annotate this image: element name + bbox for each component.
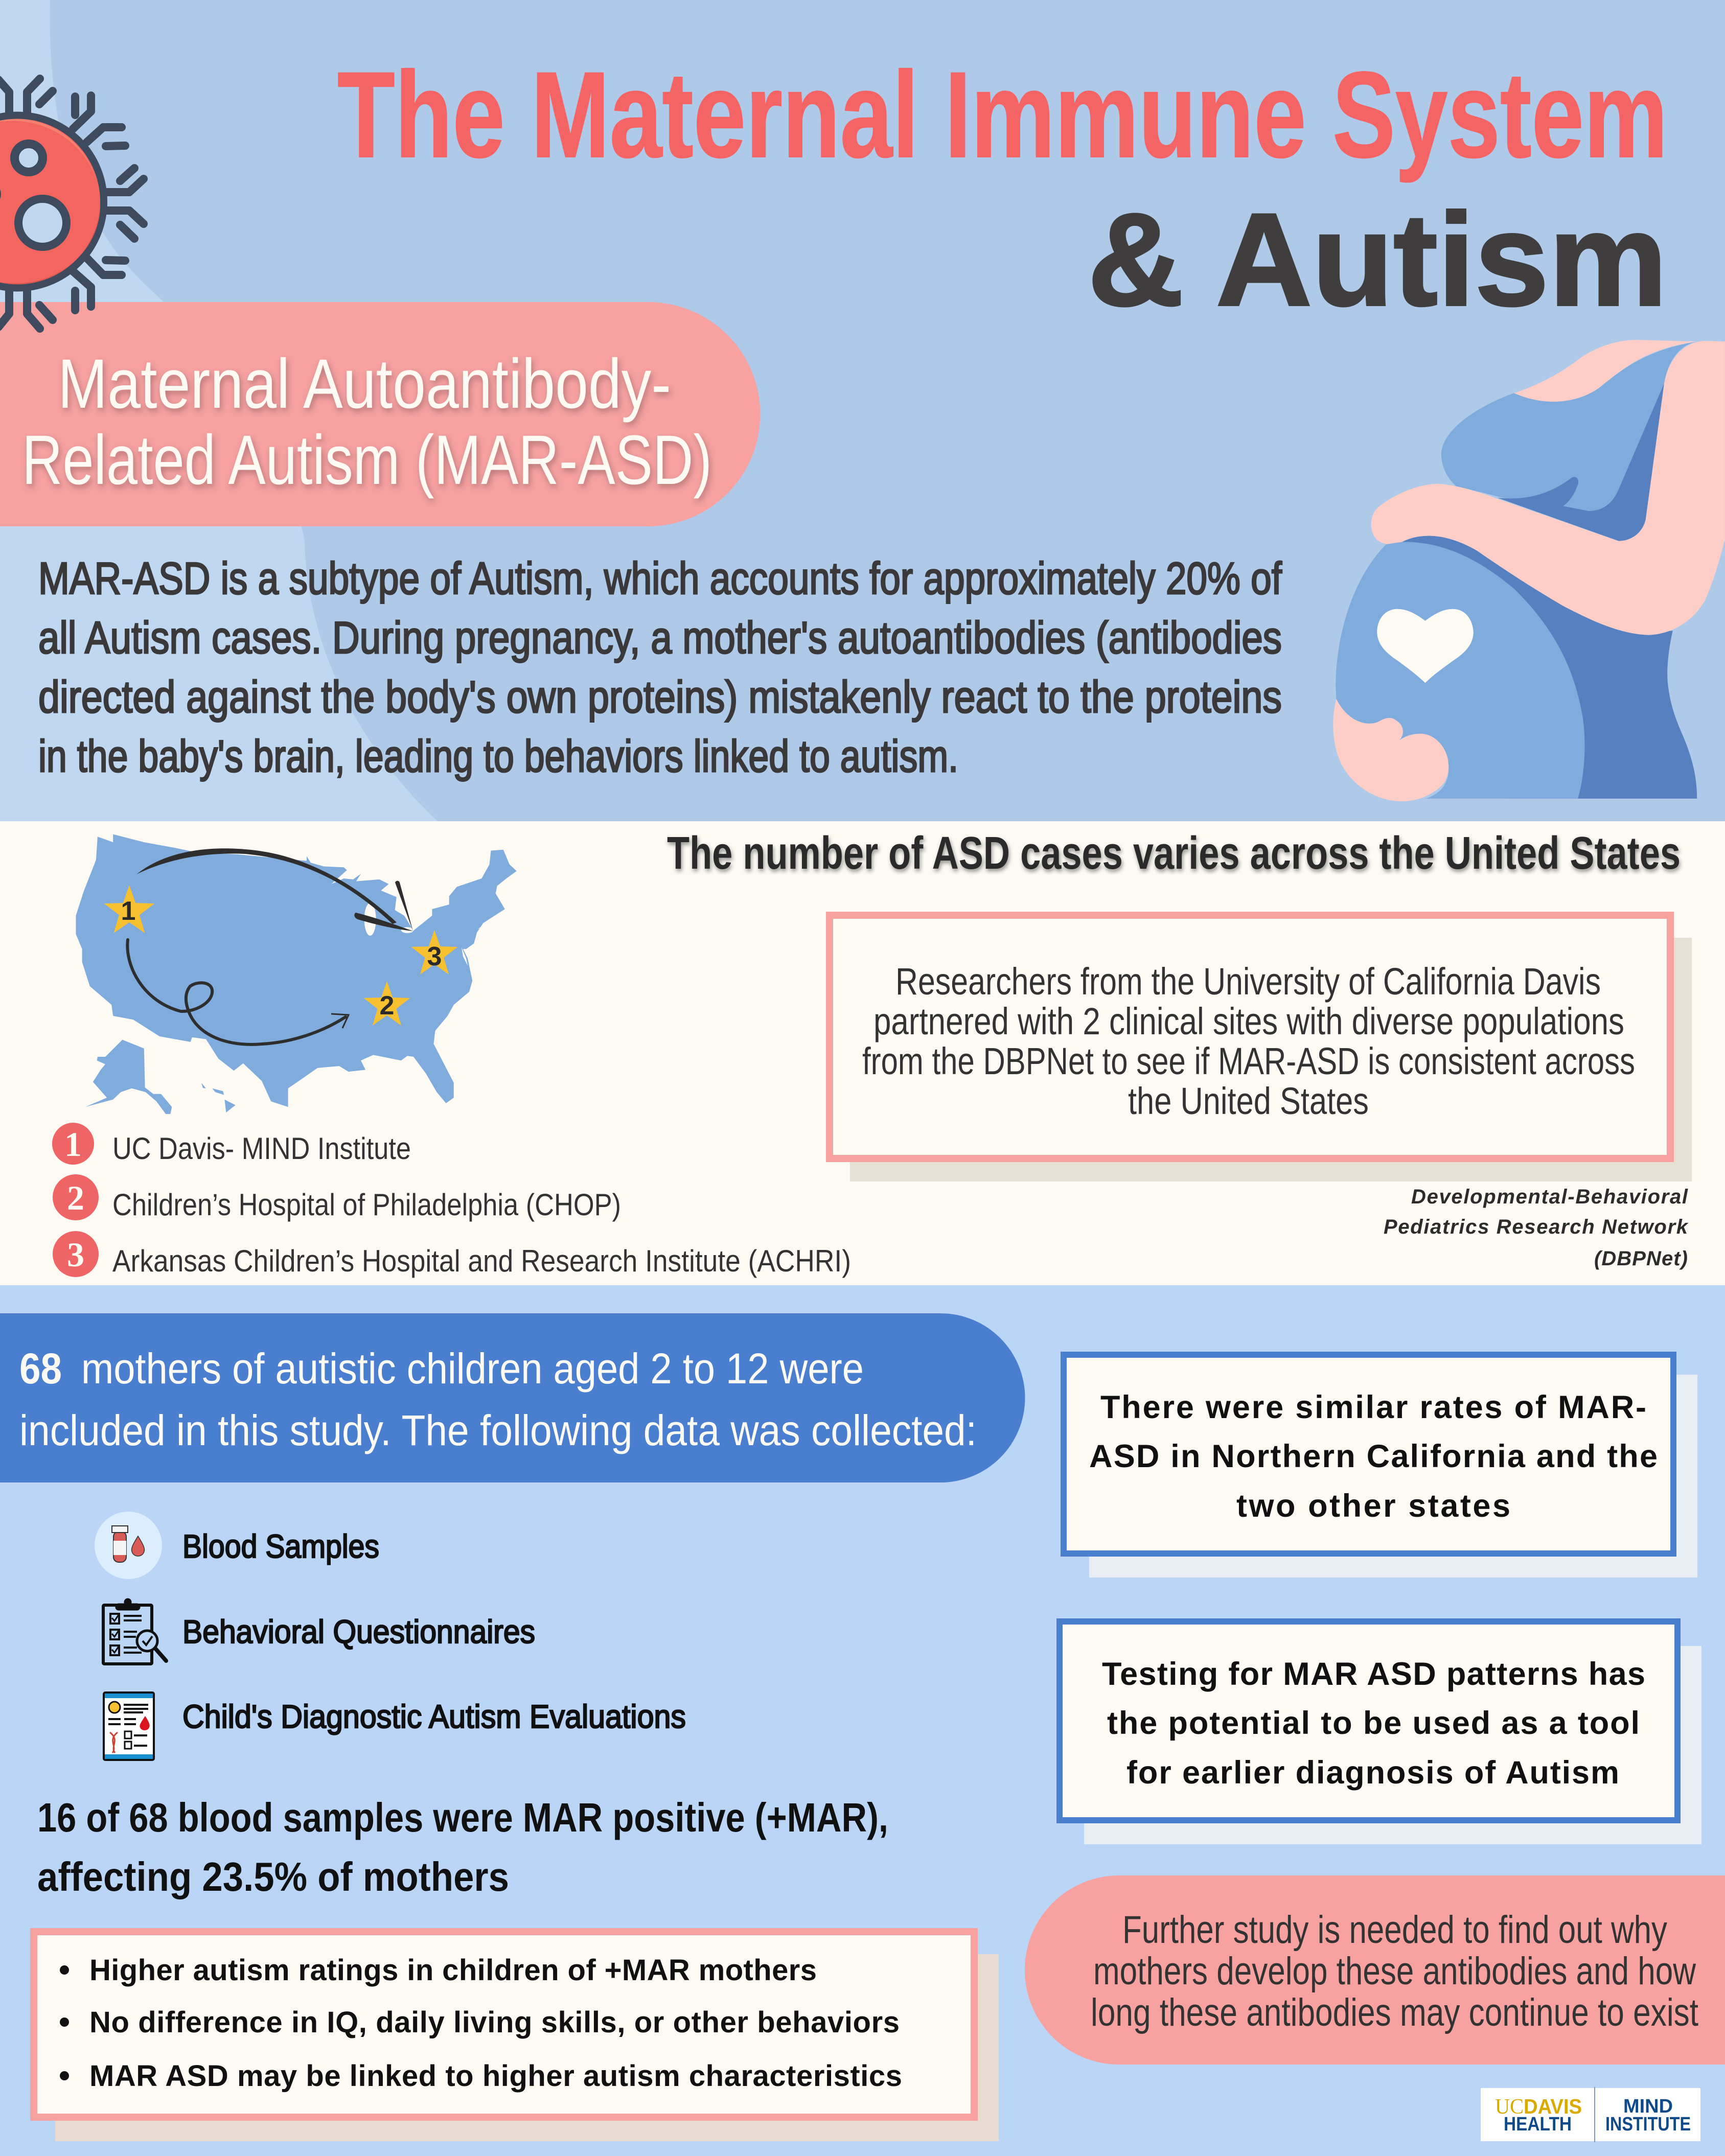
- note: DBPNet: Pediatrics Research Network: [1384, 1216, 1689, 1238]
- map of the United States: [76, 834, 517, 1114]
- star marker 3: 3: [427, 942, 442, 971]
- logo: UC Davis Health MIND Institute: [1481, 2087, 1700, 2142]
- finding: MAR positive: 16 of 68 blood samples were MAR positive (+MAR),: [37, 1795, 888, 1840]
- icon: immune cell: [0, 79, 144, 329]
- intro paragraph: in the baby's brain, leading to behaviors linked to autism.: [38, 731, 958, 781]
- data item: questionnaires: [103, 1599, 535, 1664]
- site 2: 2: [67, 1178, 84, 1217]
- callout: similar rates: ASD in Northern California and the: [1089, 1439, 1658, 1474]
- note: DBPNet: Developmental-Behavioral: [1411, 1186, 1688, 1208]
- site 3: 3: [67, 1235, 84, 1274]
- data item: blood samples: Blood Samples: [182, 1528, 379, 1565]
- site 1: [52, 1123, 411, 1166]
- illustration: pregnant woman: [1333, 340, 1725, 801]
- data item: questionnaires: Behavioral Questionnaires: [182, 1613, 535, 1650]
- logo: UC Davis Health MIND Institute: DAVIS: [1524, 2095, 1582, 2118]
- callout: further study: [1025, 1875, 1725, 2065]
- intro paragraph: directed against the body's own proteins) mistakenly react to the proteins: [38, 671, 1282, 722]
- note: DBPNet: [1384, 1186, 1689, 1270]
- callout: researchers: the United States: [1128, 1080, 1369, 1122]
- callout: MAR outcomes: Higher autism ratings in children of +MAR mothers: [89, 1954, 817, 1987]
- intro paragraph: MAR-ASD is a subtype of Autism, which accounts for approximately 20% of: [38, 553, 1282, 604]
- site 1: 1: [64, 1125, 82, 1164]
- finding: MAR positive: affecting 23.5% of mothers: [37, 1854, 509, 1899]
- star marker 3: [411, 930, 458, 975]
- callout: similar rates: two other states: [1236, 1488, 1510, 1524]
- callout: researchers: [830, 915, 1692, 1181]
- study banner: [0, 1313, 1025, 1482]
- callout: MAR outcomes: [34, 1932, 999, 2141]
- title: [337, 47, 1668, 333]
- subtitle pill: Related Autism (MAR-ASD): [22, 421, 712, 499]
- star marker 1: [104, 885, 154, 933]
- study banner: 68: [19, 1344, 62, 1393]
- arrow: to ACHRI: [136, 848, 413, 931]
- title: & Autism: [1088, 186, 1667, 333]
- subtitle pill: [0, 302, 761, 526]
- site 1: UC Davis- MIND Institute: [112, 1131, 411, 1166]
- site 2: Children’s Hospital of Philadelphia (CHOP): [112, 1188, 621, 1222]
- icon: blood tube: [95, 1512, 162, 1579]
- data item: blood samples: [95, 1512, 379, 1579]
- panel: clinical sites background: [0, 821, 1725, 1285]
- site legend: [52, 1123, 851, 1278]
- site 3: Arkansas Children’s Hospital and Research Institute (ACHRI): [112, 1244, 851, 1278]
- data item: diagnostic evaluations: [104, 1693, 686, 1760]
- icon: clipboard with magnifier: [103, 1599, 166, 1664]
- note: DBPNet: (DBPNet): [1594, 1247, 1688, 1270]
- finding: MAR positive: [37, 1795, 888, 1899]
- callout: MAR outcomes: No difference in IQ, daily living skills, or other behaviors: [89, 2006, 900, 2039]
- study banner: included in this study. The following data was collected:: [19, 1406, 977, 1454]
- intro paragraph: [38, 553, 1282, 781]
- star marker 2: 2: [380, 991, 394, 1021]
- callout: similar rates: There were similar rates of MAR-: [1100, 1389, 1646, 1425]
- panel: study background: [0, 1285, 1725, 2156]
- callout: earlier diagnosis: the potential to be used as a tool: [1107, 1705, 1640, 1741]
- logo: UC Davis Health MIND Institute: UC: [1495, 2095, 1524, 2119]
- star marker 1: 1: [121, 896, 135, 926]
- study banner: mothers of autistic children aged 2 to 12 were: [81, 1344, 864, 1393]
- intro paragraph: all Autism cases. During pregnancy, a mother's autoantibodies (antibodies: [38, 612, 1282, 663]
- site 3: [53, 1231, 851, 1278]
- callout: similar rates: [1064, 1355, 1697, 1578]
- callout: earlier diagnosis: Testing for MAR ASD patterns has: [1102, 1656, 1645, 1692]
- icon: medical report: [104, 1693, 154, 1760]
- callout: earlier diagnosis: for earlier diagnosis of Autism: [1126, 1755, 1619, 1791]
- data item: diagnostic evaluations: Child's Diagnostic Autism Evaluations: [182, 1698, 686, 1735]
- callout: earlier diagnosis: [1060, 1621, 1701, 1844]
- arrow: to CHOP: [127, 940, 349, 1045]
- site 2: [53, 1174, 621, 1222]
- logo: UC Davis Health MIND Institute: MIND: [1623, 2096, 1673, 2117]
- logo: UC Davis Health MIND Institute: HEALTH: [1504, 2114, 1572, 2135]
- star marker 2: [364, 981, 410, 1026]
- logo: UC Davis Health MIND Institute: INSTITUTE: [1605, 2114, 1691, 2135]
- subtitle pill: Maternal Autoantibody-: [58, 345, 671, 423]
- callout: MAR outcomes: MAR ASD may be linked to higher autism characteristics: [89, 2059, 902, 2093]
- header background: [0, 0, 1725, 821]
